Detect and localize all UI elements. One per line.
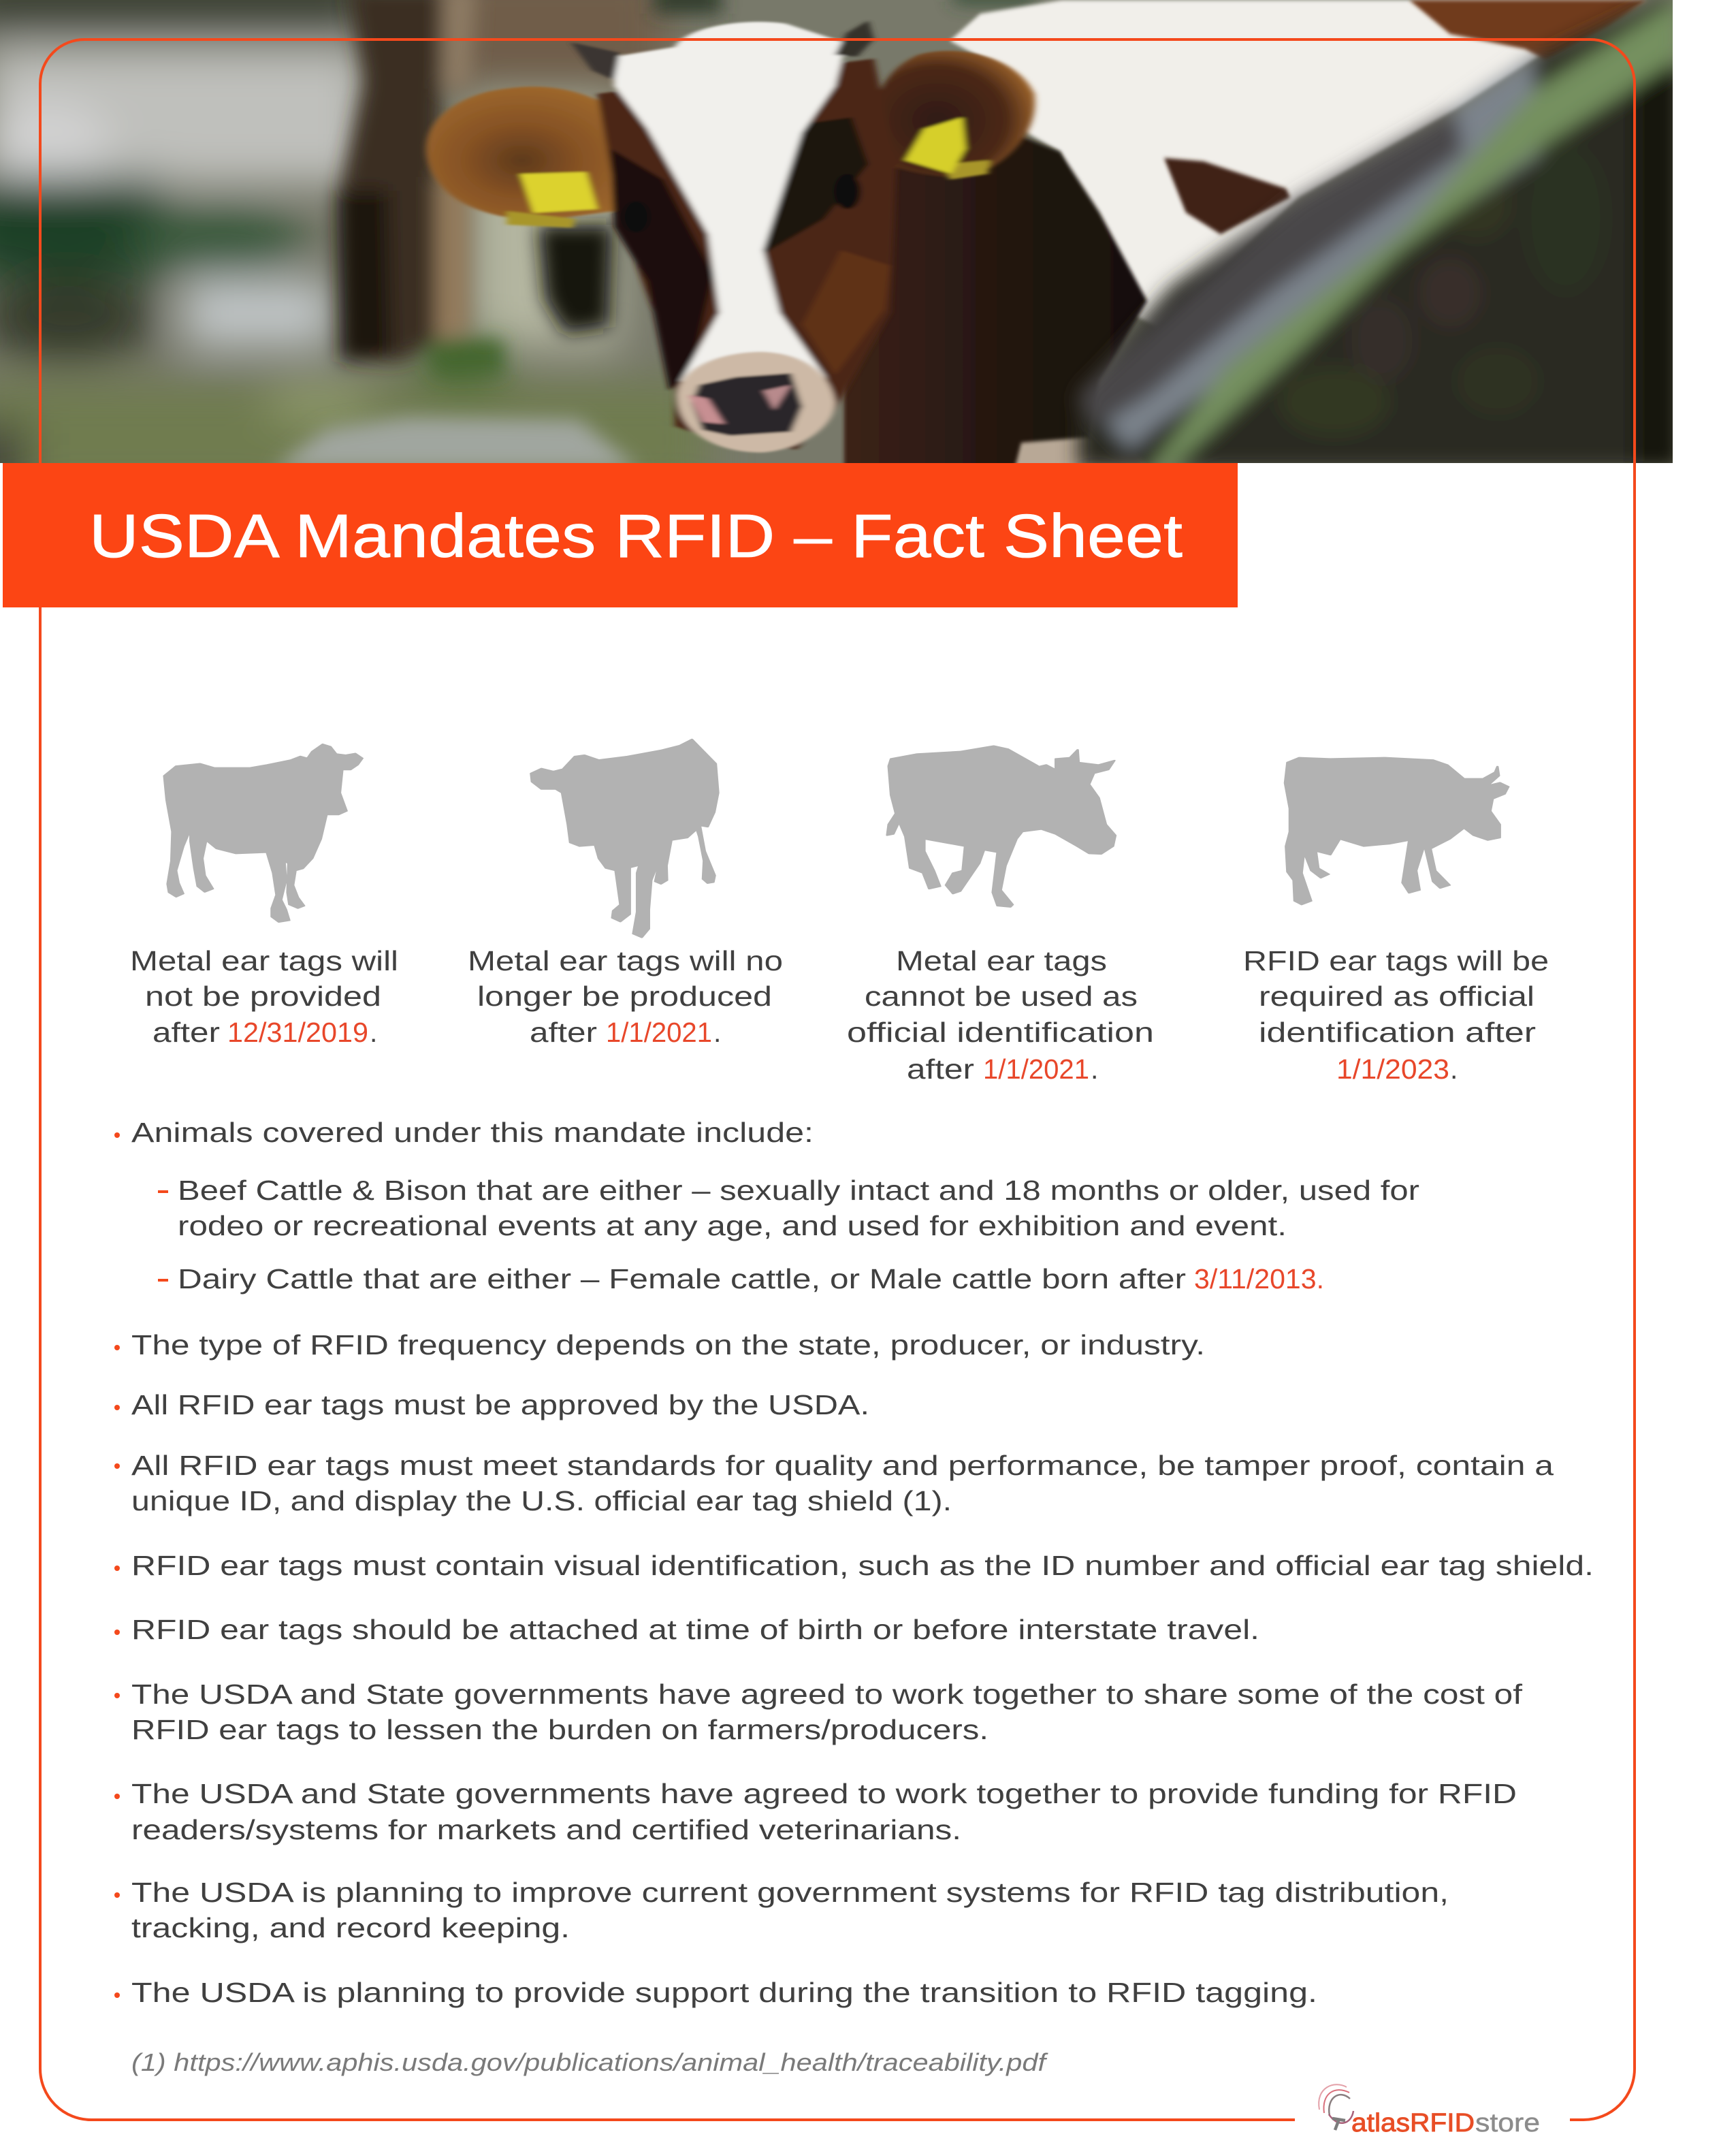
caption 1: 12/31/2019	[227, 1017, 368, 1048]
head	[598, 59, 896, 449]
horns	[570, 42, 620, 80]
bullet: frequency: The type of RFID frequency depends on the state, producer, or industry.	[131, 1329, 1205, 1361]
sub-bullet: dairy cattle: 3/11/2013.	[1194, 1263, 1324, 1294]
bullet: standards	[114, 1450, 1554, 1516]
caption 1	[130, 945, 398, 1048]
cow body	[950, 0, 1647, 327]
bullet: systems	[114, 1877, 1449, 1943]
caption 4: required as official	[1259, 981, 1534, 1012]
icon: cow silhouette 2	[531, 740, 718, 938]
right ear	[872, 51, 1035, 177]
background blur	[0, 0, 708, 504]
caption 1: .	[370, 1017, 377, 1048]
caption 3: 1/1/2021	[983, 1053, 1089, 1085]
logo: atlasRFIDstore	[1319, 2084, 1540, 2138]
caption 2: after	[530, 1017, 597, 1048]
head group	[422, 20, 1040, 454]
fence rail	[1078, 0, 1682, 470]
bullet: systems: tracking, and record keeping.	[131, 1912, 570, 1943]
bullet: standards: All RFID ear tags must meet standards for quality and performance, be tamper proof, contain a	[131, 1450, 1554, 1481]
caption 3: after	[907, 1053, 974, 1085]
caption 2: .	[713, 1017, 721, 1048]
bullet: animals covered	[114, 1117, 1419, 1241]
caption 3	[847, 945, 1154, 1085]
caption 3: official identification	[847, 1017, 1154, 1048]
bullet: visual identification: RFID ear tags must contain visual identification, such as the ID number and official ear tag shield.	[131, 1550, 1594, 1581]
caption 1: Metal ear tags will	[130, 945, 398, 976]
heading: USDA Mandates RFID – Fact Sheet	[89, 503, 1183, 571]
title banner	[3, 463, 1238, 607]
eyes	[834, 174, 861, 209]
caption 2: longer be produced	[477, 981, 772, 1012]
caption 2: Metal ear tags will no	[468, 945, 783, 976]
caption 3: .	[1091, 1053, 1098, 1085]
bullet: funding: The USDA and State governments have agreed to work together to provide funding for RFID	[131, 1778, 1517, 1809]
caption 4	[1243, 945, 1549, 1085]
sub-bullet: beef cattle: rodeo or recreational events at any age, and used for exhibition and event.	[178, 1210, 1287, 1241]
bullet: attachment: RFID ear tags should be attached at time of birth or before interstate travel.	[131, 1614, 1259, 1645]
bullet: systems: The USDA is planning to improve current government systems for RFID tag distribution,	[131, 1877, 1449, 1908]
sub-bullet: dairy cattle: Dairy Cattle that are either – Female cattle, or Male cattle born after	[178, 1263, 1186, 1294]
bullet: cost sharing	[114, 1679, 1523, 1745]
photo: cow with yellow ear tags	[0, 0, 1682, 504]
caption 4: 1/1/2023	[1336, 1053, 1449, 1085]
bullet: funding	[114, 1778, 1517, 1845]
sub-bullet: beef cattle	[158, 1175, 1419, 1241]
icon: cow silhouette 4	[1285, 757, 1509, 904]
bullet: cost sharing: RFID ear tags to lessen the burden on farmers/producers.	[131, 1714, 988, 1745]
caption 2: 1/1/2021	[606, 1017, 712, 1048]
caption 4: RFID ear tags will be	[1243, 945, 1549, 976]
logo: atlasRFIDstore: atlasRFID	[1351, 2109, 1475, 2138]
icon: signal arcs and figure	[1319, 2084, 1353, 2130]
footnote: (1) https://www.aphis.usda.gov/publications/animal_health/traceability.pdf	[131, 2048, 1049, 2076]
bullet: approved: All RFID ear tags must be approved by the USDA.	[131, 1389, 869, 1420]
caption 4: .	[1450, 1053, 1458, 1085]
bullet: standards: unique ID, and display the U.S. official ear tag shield (1).	[131, 1485, 952, 1516]
ear tags	[507, 211, 575, 228]
caption 3: cannot be used as	[865, 981, 1138, 1012]
bullet: cost sharing: The USDA and State governments have agreed to work together to share some of the cost of	[131, 1679, 1523, 1710]
bullet: transition support: The USDA is planning to provide support during the transition to RFID tagging.	[131, 1977, 1317, 2008]
left ear	[426, 86, 639, 221]
bullet: animals covered: Animals covered under this mandate include:	[131, 1117, 814, 1148]
bullet: funding: readers/systems for markets and certified veterinarians.	[131, 1814, 961, 1845]
logo: atlasRFIDstore: store	[1475, 2109, 1540, 2138]
caption 3: Metal ear tags	[896, 945, 1107, 976]
caption 4: identification after	[1259, 1017, 1536, 1048]
caption 1: not be provided	[145, 981, 381, 1012]
caption 1: after	[152, 1017, 220, 1048]
icon: cow silhouette 3	[887, 746, 1115, 907]
icon: cow silhouette 1	[164, 744, 362, 922]
sub-bullet: beef cattle: Beef Cattle & Bison that are either – sexually intact and 18 months or older, used for	[178, 1175, 1419, 1206]
caption 2	[468, 945, 783, 1048]
